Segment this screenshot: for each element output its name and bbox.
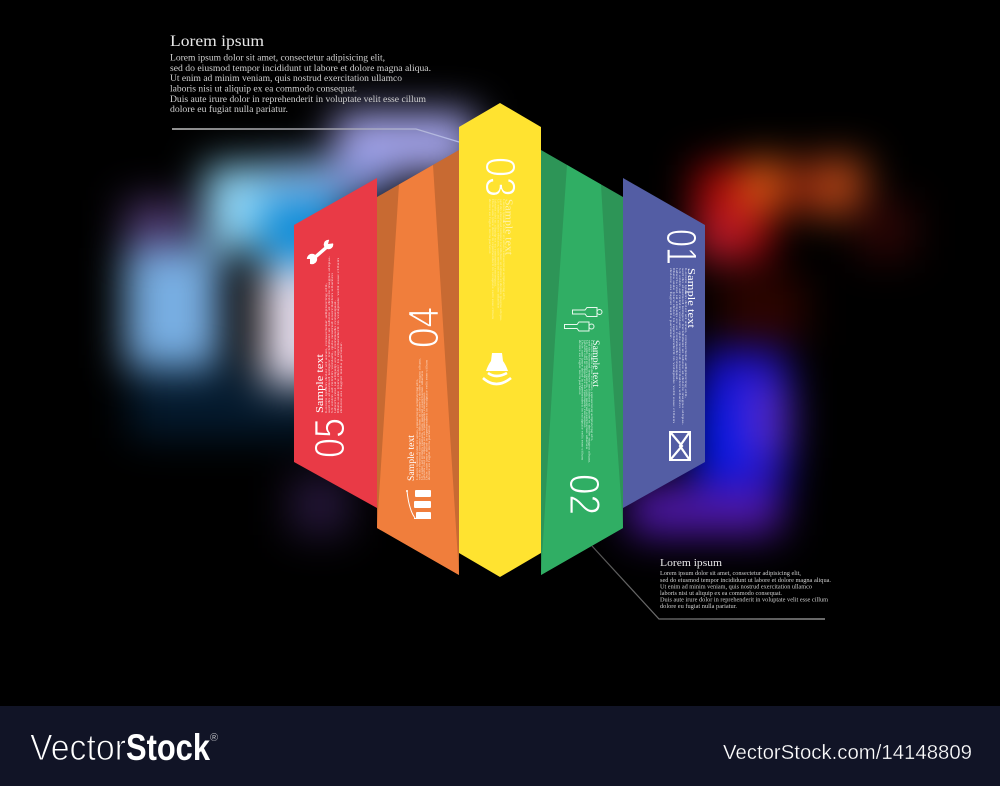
body text 02: sed do eiusmod tempor incididunt ut labore et dolore magna aliqua. — [588, 340, 592, 463]
footer logo: Stock — [126, 727, 210, 768]
body text 03: Lorem ipsum dolor sit amet, consectetur adipisicing elit, — [502, 199, 506, 300]
callout body text: Duis aute irure dolor in reprehenderit in voluptate velit esse cillum — [660, 596, 828, 604]
body text 01: Ut enim ad minim veniam, quis nostrud exercitation ullamco — [677, 268, 682, 408]
body text 05: Lorem ipsum dolor sit amet, consectetur adipisicing elit, — [324, 283, 329, 413]
callout body text: Ut enim ad minim veniam, quis nostrud exercitation ullamco — [170, 73, 402, 84]
callout body text — [660, 570, 831, 610]
body text 04: sed do eiusmod tempor incididunt ut labore et dolore magna aliqua. — [417, 358, 421, 480]
body text 04: Ut enim ad minim veniam, quis nostrud exercitation ullamco — [420, 370, 424, 480]
body text 01: sed do eiusmod tempor incididunt ut labore et dolore magna aliqua. — [681, 268, 685, 425]
body text 05: sed do eiusmod tempor incididunt ut labore et dolore magna aliqua. — [327, 256, 331, 413]
footer logo — [30, 727, 218, 768]
footer image id: VectorStock.com/14148809 — [723, 742, 972, 764]
body text 02: Lorem ipsum dolor sit amet, consectetur adipisicing elit, — [590, 340, 594, 441]
body text 03 — [488, 199, 506, 321]
panel: 01 blue — [623, 178, 705, 508]
panel: 02 green — [541, 150, 623, 575]
icon: bottles — [564, 308, 602, 331]
icon: wrench — [305, 237, 336, 267]
body text 03: laboris nisi ut aliquip ex ea commodo consequat. — [494, 199, 498, 287]
body text 01: Lorem ipsum dolor sit amet, consectetur adipisicing elit, — [683, 268, 688, 398]
callout heading: Lorem ipsum — [170, 33, 265, 50]
icon: envelope — [670, 432, 690, 460]
body text 02 — [578, 340, 594, 463]
callout body text: Duis aute irure dolor in reprehenderit in voluptate velit esse cillum — [170, 94, 426, 105]
icon: bell — [483, 353, 511, 384]
body text 05: dolore eu fugiat nulla pariatur. — [339, 342, 343, 413]
body text 04: laboris nisi ut aliquip ex ea commodo consequat. — [422, 392, 426, 480]
body text 03: dolore eu fugiat nulla pariatur. — [488, 199, 492, 254]
body text 03: sed do eiusmod tempor incididunt ut labore et dolore magna aliqua. — [499, 199, 503, 321]
label: sample text: Sample text — [590, 340, 600, 387]
body text 01: Duis aute irure dolor in reprehenderit in voluptate velit esse cillum — [672, 268, 676, 423]
body text 05: Duis aute irure dolor in reprehenderit in voluptate velit esse cillum — [336, 258, 340, 413]
body text 05: Ut enim ad minim veniam, quis nostrud exercitation ullamco — [330, 273, 335, 413]
label: sample text: Sample text — [685, 268, 697, 328]
callout body text: laboris nisi ut aliquip ex ea commodo consequat. — [170, 84, 357, 94]
body text 02: dolore eu fugiat nulla pariatur. — [578, 340, 582, 395]
callout body text: Lorem ipsum dolor sit amet, consectetur adipisicing elit, — [660, 570, 801, 577]
number 02: 02 — [560, 474, 608, 515]
callout: top left — [170, 33, 459, 142]
callout body text — [170, 52, 431, 115]
body text 04: dolore eu fugiat nulla pariatur. — [427, 425, 431, 480]
body text 02: Ut enim ad minim veniam, quis nostrud exercitation ullamco — [585, 340, 589, 450]
body text 01 — [669, 268, 688, 425]
callout leader line — [172, 129, 459, 142]
callout body text: sed do eiusmod tempor incididunt ut labore et dolore magna aliqua. — [660, 577, 831, 584]
callout body text: sed do eiusmod tempor incididunt ut labore et dolore magna aliqua. — [170, 63, 431, 74]
callout: bottom right — [592, 546, 831, 619]
body text 03: Duis aute irure dolor in reprehenderit in voluptate velit esse cillum — [491, 199, 495, 320]
label: sample text: Sample text — [502, 199, 514, 255]
footer logo: ® — [210, 732, 218, 744]
body text 02: Duis aute irure dolor in reprehenderit in voluptate velit esse cillum — [580, 340, 584, 461]
number 04: 04 — [400, 307, 448, 348]
panel: 04 orange — [377, 150, 459, 575]
footer band — [0, 706, 1000, 786]
body text 01: dolore eu fugiat nulla pariatur. — [669, 268, 673, 339]
body text 05: laboris nisi ut aliquip ex ea commodo consequat. — [333, 300, 337, 413]
body text 04: Duis aute irure dolor in reprehenderit in voluptate velit esse cillum — [425, 359, 429, 480]
label: sample text: Sample text — [314, 354, 326, 413]
body text 03: Ut enim ad minim veniam, quis nostrud exercitation ullamco — [496, 199, 500, 309]
blurred background: left blobs — [125, 112, 475, 535]
callout body text: dolore eu fugiat nulla pariatur. — [170, 104, 288, 115]
label: sample text: Sample text — [407, 435, 417, 481]
body text 02: laboris nisi ut aliquip ex ea commodo consequat. — [583, 340, 587, 428]
panel: 03 yellow — [459, 103, 541, 577]
body text 05 — [324, 256, 343, 413]
callout heading: Lorem ipsum — [660, 557, 722, 569]
body text 04 — [415, 358, 431, 480]
callout body text: laboris nisi ut aliquip ex ea commodo consequat. — [660, 590, 782, 597]
number 01: 01 — [657, 229, 705, 265]
callout body text: Lorem ipsum dolor sit amet, consectetur adipisicing elit, — [170, 52, 385, 64]
body text 01: laboris nisi ut aliquip ex ea commodo consequat. — [675, 268, 679, 381]
callout body text: dolore eu fugiat nulla pariatur. — [660, 603, 737, 610]
callout body text: Ut enim ad minim veniam, quis nostrud exercitation ullamco — [660, 584, 812, 590]
footer logo: Vector — [30, 727, 126, 768]
icon: bar chart — [406, 490, 431, 519]
panel: 05 red — [294, 178, 377, 508]
callout leader line — [592, 546, 825, 619]
blurred background: right blobs — [630, 158, 915, 535]
number 05: 05 — [306, 418, 354, 458]
body text 04: Lorem ipsum dolor sit amet, consectetur adipisicing elit, — [415, 379, 419, 480]
number 03: 03 — [476, 157, 524, 197]
